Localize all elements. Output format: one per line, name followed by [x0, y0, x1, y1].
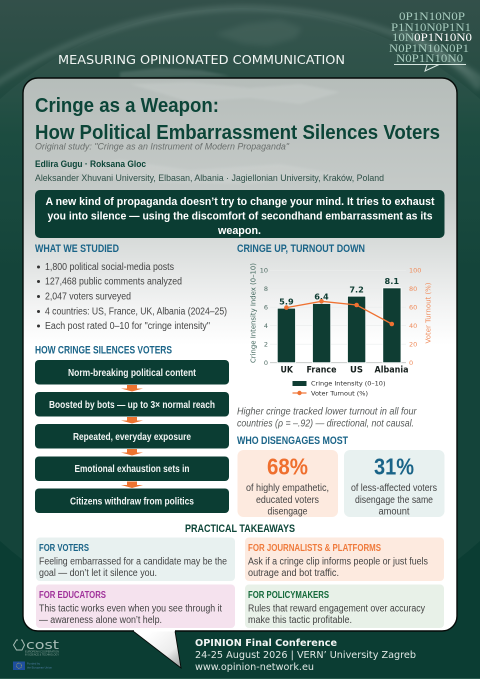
study facts bullet list: Each post rated 0–10 for "cringe intensity": [45, 321, 210, 332]
key message banner: you into silence — using the discomfort of secondhand embarrassment as its: [48, 210, 432, 222]
takeaway: for voters: [36, 538, 235, 581]
flow step 3: [35, 424, 229, 448]
section: who disengages most: [237, 435, 444, 518]
key message banner: weapon.: [217, 225, 261, 237]
combo chart: cringe intensity and voter turnout: [250, 263, 432, 398]
takeaway: for educators: FOR EDUCATORS: [39, 590, 106, 601]
logo: OPINION binary speech bubble: P1N10N0P1N1: [391, 22, 471, 34]
speech bubble tail: [133, 628, 181, 668]
bars: [277, 288, 401, 363]
stat card: 68%: of highly empathetic,: [246, 483, 329, 494]
takeaway: for journalists and platforms: outrage and bot traffic.: [248, 568, 339, 579]
conference information: [195, 638, 416, 673]
takeaway: for policymakers: make this tactic profitable.: [248, 615, 352, 626]
main title: How Political Embarrassment Silences Voters: [35, 121, 440, 144]
takeaway: for educators: [36, 584, 235, 628]
logo: funded by the European Union: [13, 662, 52, 670]
authors: Edlira Gugu · Roksana Gloc: [35, 159, 146, 169]
takeaway: for journalists and platforms: Ask if a cringe clip informs people or just fuels: [248, 556, 428, 568]
logo: funded by the European Union: Funded by: [27, 662, 41, 666]
takeaway: for journalists and platforms: FOR JOURNALISTS & PLATFORMS: [248, 543, 381, 554]
flow step 1: [35, 360, 229, 384]
takeaway: for journalists and platforms: [245, 538, 444, 581]
right axis ticks: [409, 266, 421, 367]
stat card: 31%: of less-affected voters: [351, 483, 437, 494]
left axis ticks: [260, 266, 268, 367]
logo: OPINION binary speech bubble: [389, 11, 472, 71]
takeaway: for voters: goal — don’t let it silence you.: [39, 568, 157, 579]
key message banner: [35, 190, 444, 238]
arrow 4: [121, 482, 143, 488]
conference information: OPINION Final Conference: [195, 638, 337, 649]
logo: COST: IN SCIENCE & TECHNOLOGY: [25, 652, 59, 656]
category labels: France: [306, 366, 337, 376]
flow step 3: Repeated, everyday exposure: [73, 432, 191, 443]
study facts bullet list: 127,468 public comments analyzed: [45, 276, 182, 288]
takeaway: for policymakers: Rules that reward engagement over accuracy: [248, 604, 425, 614]
bar value labels: 8.1: [385, 276, 399, 286]
takeaway: for educators: This tactic works even when you see through it: [39, 604, 222, 614]
takeaway: for policymakers: FOR POLICYMAKERS: [248, 590, 329, 601]
left axis ticks: 6: [264, 304, 268, 312]
right axis ticks: 60: [409, 304, 417, 312]
right axis ticks: 40: [409, 322, 417, 330]
header title: MEASURING OPINIONATED COMMUNICATION: [58, 52, 345, 67]
stat card: 31%: disengage the same: [355, 495, 433, 506]
left axis ticks: 0: [264, 359, 268, 367]
logo: COST: EUROPEAN COOPERATION: [25, 650, 59, 654]
conference information: www.opinion-network.eu: [195, 662, 314, 673]
heading: what we studied: WHAT WE STUDIED: [35, 243, 119, 255]
arrow 1: [121, 385, 143, 392]
main title: [35, 94, 440, 144]
stat card: 68%: educated voters: [256, 495, 319, 506]
conference information: 24-25 August 2026 | VERN’ University Zagreb: [195, 650, 416, 661]
stat card: 31%: [344, 450, 444, 518]
category labels: Albania: [374, 366, 409, 376]
heading: cringe up, turnout down: CRINGE UP, TURNOUT DOWN: [237, 243, 365, 255]
stat card: 68%: disengage: [268, 506, 308, 518]
flow step 4: Emotional exhaustion sets in: [74, 464, 190, 475]
heading: who disengages most: WHO DISENGAGES MOST: [237, 435, 348, 447]
left axis ticks: 8: [264, 285, 268, 293]
logo: OPINION binary speech bubble: N0P1N10N0: [396, 53, 463, 65]
arrow 2: [121, 417, 143, 424]
category labels: [280, 366, 409, 376]
flow step 2: Boosted by bots — up to 3× normal reach: [49, 400, 215, 411]
takeaway: for voters: FOR VOTERS: [39, 543, 89, 554]
study facts bullet list: 1,800 political social-media posts: [45, 262, 174, 273]
logo: OPINION binary speech bubble: 10N0P1N10N0: [392, 32, 472, 44]
flow step 2: [35, 392, 229, 416]
flow step 1: Norm-breaking political content: [68, 368, 197, 379]
right axis ticks: 20: [409, 340, 417, 348]
main title: Cringe as a Weapon:: [35, 94, 219, 117]
chart legend: Voter Turnout (%): [311, 390, 368, 398]
affiliations: Aleksander Xhuvani University, Elbasan, Albania · Jagiellonian University, Kraków, Poland: [35, 173, 384, 183]
left axis ticks: 4: [264, 322, 268, 330]
section: what we studied: [35, 243, 227, 332]
stat card: 31%: amount: [378, 506, 410, 518]
logo: OPINION binary speech bubble: 0P1N10N0P: [399, 11, 465, 23]
bar value labels: 5.9: [279, 296, 294, 306]
logo: COST: [14, 638, 59, 656]
takeaway: for voters: Feeling embarrassed for a candidate may be the: [39, 556, 227, 568]
study facts bullet list: [37, 262, 227, 332]
key message banner: A new kind of propaganda doesn’t try to change your mind. It tries to exhaust: [46, 196, 435, 208]
section: how cringe silences voters: [35, 344, 229, 513]
chart caption: [237, 407, 417, 430]
heading: how cringe silences voters: HOW CRINGE SILENCES VOTERS: [35, 344, 172, 356]
bar value labels: 7.2: [349, 284, 364, 294]
flow step 5: Citizens withdraw from politics: [70, 496, 194, 508]
logo: funded by the European Union: the European Union: [27, 666, 52, 670]
takeaway: for policymakers: [245, 584, 444, 628]
arrow 3: [121, 449, 143, 456]
bar value labels: [279, 276, 399, 306]
chart caption: countries (ρ = –.92) — directional, not causal.: [237, 418, 414, 430]
chart legend: Cringe Intensity (0–10): [311, 380, 386, 388]
category labels: US: [350, 366, 363, 376]
chart caption: Higher cringe tracked lower turnout in all four: [237, 407, 417, 418]
left axis ticks: 10: [260, 266, 268, 274]
faint map texture in panel: [60, 82, 340, 184]
takeaway: for educators: — awareness alone won’t help.: [39, 615, 162, 626]
original study subtitle: Original study: "Cringe as an Instrument of Modern Propaganda": [35, 142, 290, 152]
study facts bullet list: 4 countries: US, France, UK, Albania (2024–25): [45, 306, 227, 318]
study facts bullet list: 2,047 voters surveyed: [45, 292, 131, 302]
turnout line: [284, 299, 394, 326]
speech bubble panel: [23, 78, 457, 668]
axis titles: Cringe Intensity Index (0–10): [250, 263, 258, 363]
right axis ticks: 80: [409, 285, 417, 293]
right axis ticks: 100: [409, 266, 421, 274]
chart legend: [292, 380, 386, 398]
flow step 5: [35, 488, 229, 513]
right axis ticks: 0: [409, 359, 413, 367]
flow step 4: [35, 456, 229, 481]
axis titles: [250, 263, 432, 363]
bar value labels: 6.4: [314, 292, 329, 302]
left axis ticks: 2: [264, 340, 268, 348]
logo: OPINION binary speech bubble: N0P1N10N0P1: [389, 43, 469, 55]
heading: practical takeaways: PRACTICAL TAKEAWAYS: [185, 523, 295, 535]
stat card: 68%: 68%: [267, 454, 308, 480]
stat card: 68%: [238, 450, 338, 518]
logo: COST: cost: [26, 638, 59, 652]
category labels: UK: [280, 366, 293, 376]
axis titles: Voter Turnout (%): [424, 282, 432, 344]
stat card: 31%: 31%: [374, 454, 414, 480]
